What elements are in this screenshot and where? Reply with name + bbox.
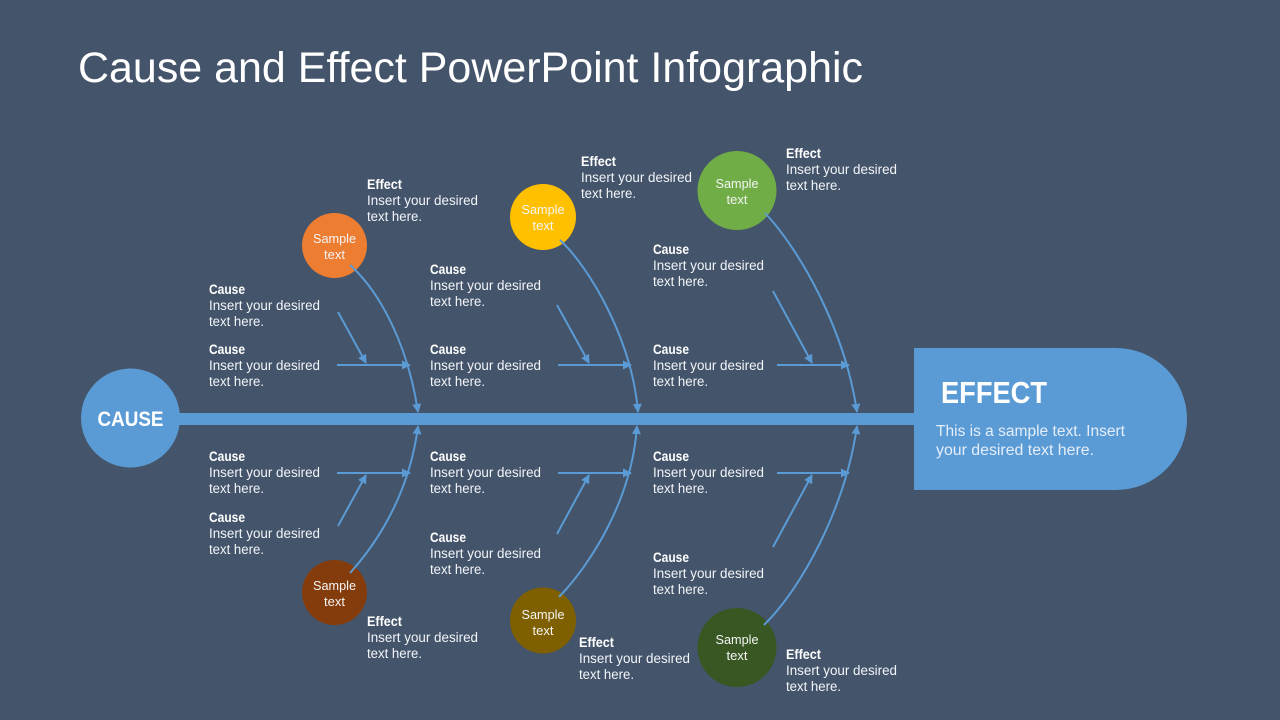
text: cause lower 1a — [209, 449, 320, 496]
text: cause upper 3b — [653, 342, 764, 389]
text: cause upper 2a: Insert your desired — [430, 278, 541, 293]
circle: dark yellow: Sample — [522, 607, 564, 622]
circle: yellow: Sample — [522, 202, 564, 217]
text: cause lower 2a: text here. — [430, 481, 485, 496]
text: cause upper 3b: Insert your desired — [653, 358, 764, 373]
circle: dark yellow — [510, 588, 576, 654]
cause circle: CAUSE — [98, 408, 164, 431]
text: cause lower 3b: Insert your desired — [653, 566, 764, 581]
arrow: lower bone 3 — [764, 426, 857, 625]
text: cause upper 1a: text here. — [209, 314, 264, 329]
text: cause lower 2b: Insert your desired — [430, 546, 541, 561]
effect panel: This is a sample text. Insert — [936, 423, 1126, 440]
text: cause lower 1b: Insert your desired — [209, 526, 320, 541]
effect panel — [914, 348, 1187, 490]
arrow: upper bone 3 — [765, 213, 857, 412]
text: cause upper 1b — [209, 342, 320, 389]
text: cause upper 2a — [430, 262, 541, 309]
arrow: lower bone 1 — [350, 426, 418, 573]
text: cause upper 1b: Insert your desired — [209, 358, 320, 373]
text: cause upper 1a — [209, 282, 320, 329]
text: effect orange: text here. — [367, 209, 422, 224]
text: cause lower 3b: text here. — [653, 582, 708, 597]
circle: dark green: text — [726, 648, 748, 663]
text: cause lower 1b: text here. — [209, 542, 264, 557]
text: cause upper 3b: text here. — [653, 374, 708, 389]
text: cause lower 3a: text here. — [653, 481, 708, 496]
text: effect dark green: Insert your desired — [786, 663, 897, 678]
arrow: upper bone 2 — [560, 240, 638, 412]
arrow: lower rib 2a — [558, 472, 631, 474]
circle: green — [698, 151, 776, 230]
text: cause lower 1b — [209, 510, 320, 557]
text: cause upper 2b: Insert your desired — [430, 358, 541, 373]
text: cause upper 2a: Cause — [430, 262, 466, 277]
text: cause upper 3a: Insert your desired — [653, 258, 764, 273]
arrow: upper rib 3a — [777, 364, 849, 366]
text: cause upper 2b — [430, 342, 541, 389]
text: cause upper 2a: text here. — [430, 294, 485, 309]
title: Cause and Effect PowerPoint Infographic — [78, 44, 863, 92]
arrow: lower bone 2 — [559, 426, 637, 597]
text: effect brown: text here. — [367, 646, 422, 661]
text: effect orange: Effect — [367, 177, 402, 192]
arrow: lower rib 3a — [777, 472, 849, 474]
text: effect green: text here. — [786, 178, 841, 193]
text: cause upper 3b: Cause — [653, 342, 689, 357]
text: cause lower 1a: Cause — [209, 449, 245, 464]
text: cause upper 1a: Cause — [209, 282, 245, 297]
circle: orange: text — [324, 247, 345, 262]
effect panel: your desired text here. — [936, 442, 1094, 459]
text: effect dark yellow: text here. — [579, 667, 634, 682]
circle: orange — [302, 213, 367, 278]
text: effect yellow: text here. — [581, 186, 636, 201]
text: cause upper 2b: Cause — [430, 342, 466, 357]
arrow: upper rib 2b — [557, 305, 589, 363]
text: cause upper 1a: Insert your desired — [209, 298, 320, 313]
text: effect dark yellow — [579, 635, 690, 682]
circle: brown: Sample — [313, 578, 356, 593]
circle: dark green: Sample — [716, 632, 758, 647]
circle: dark green — [698, 608, 776, 687]
arrow: lower rib 3b — [773, 475, 812, 547]
text: effect brown — [367, 614, 478, 661]
effect panel: EFFECT — [941, 376, 1047, 410]
circle: yellow — [510, 184, 576, 250]
arrow: lower rib 1a — [337, 472, 410, 474]
text: cause lower 1b: Cause — [209, 510, 245, 525]
text: effect dark yellow: Insert your desired — [579, 651, 690, 666]
text: effect dark yellow: Effect — [579, 635, 614, 650]
spine — [175, 413, 920, 425]
arrow: lower rib 1b — [338, 475, 366, 526]
text: cause lower 2a: Cause — [430, 449, 466, 464]
text: effect brown: Effect — [367, 614, 402, 629]
circle: yellow: text — [532, 218, 554, 233]
text: effect dark green: text here. — [786, 679, 841, 694]
text: cause lower 2a: Insert your desired — [430, 465, 541, 480]
text: effect green — [786, 146, 897, 193]
text: effect yellow: Effect — [581, 154, 616, 169]
arrow: upper rib 3b — [773, 291, 812, 363]
text: cause upper 3a: Cause — [653, 242, 689, 257]
circle: brown — [302, 560, 367, 625]
text: cause upper 1b: text here. — [209, 374, 264, 389]
arrow: upper bone 1 — [350, 265, 418, 412]
text: cause upper 3a — [653, 242, 764, 289]
text: cause lower 1a: Insert your desired — [209, 465, 320, 480]
text: cause lower 2a — [430, 449, 541, 496]
text: effect yellow — [581, 154, 692, 201]
arrow: upper rib 1b — [338, 312, 366, 363]
text: cause lower 3a: Cause — [653, 449, 689, 464]
text: effect green: Insert your desired — [786, 162, 897, 177]
text: effect green: Effect — [786, 146, 821, 161]
circle: orange: Sample — [313, 231, 356, 246]
text: cause lower 1a: text here. — [209, 481, 264, 496]
arrow: lower rib 2b — [557, 475, 589, 534]
text: effect dark green: Effect — [786, 647, 821, 662]
text: effect orange — [367, 177, 478, 224]
text: cause upper 2b: text here. — [430, 374, 485, 389]
circle: green: text — [726, 192, 748, 207]
text: cause lower 3a — [653, 449, 764, 496]
text: effect orange: Insert your desired — [367, 193, 478, 208]
text: effect yellow: Insert your desired — [581, 170, 692, 185]
circle: dark yellow: text — [532, 623, 554, 638]
text: effect brown: Insert your desired — [367, 630, 478, 645]
text: cause lower 2b: text here. — [430, 562, 485, 577]
circle: brown: text — [324, 594, 345, 609]
text: cause upper 1b: Cause — [209, 342, 245, 357]
text: effect dark green — [786, 647, 897, 694]
text: cause lower 3b: Cause — [653, 550, 689, 565]
text: cause upper 3a: text here. — [653, 274, 708, 289]
arrow: upper rib 1a — [337, 364, 410, 366]
arrow: upper rib 2a — [558, 364, 631, 366]
text: cause lower 3b — [653, 550, 764, 597]
text: cause lower 2b: Cause — [430, 530, 466, 545]
cause circle — [81, 368, 180, 468]
text: cause lower 3a: Insert your desired — [653, 465, 764, 480]
text: cause lower 2b — [430, 530, 541, 577]
circle: green: Sample — [716, 176, 758, 191]
